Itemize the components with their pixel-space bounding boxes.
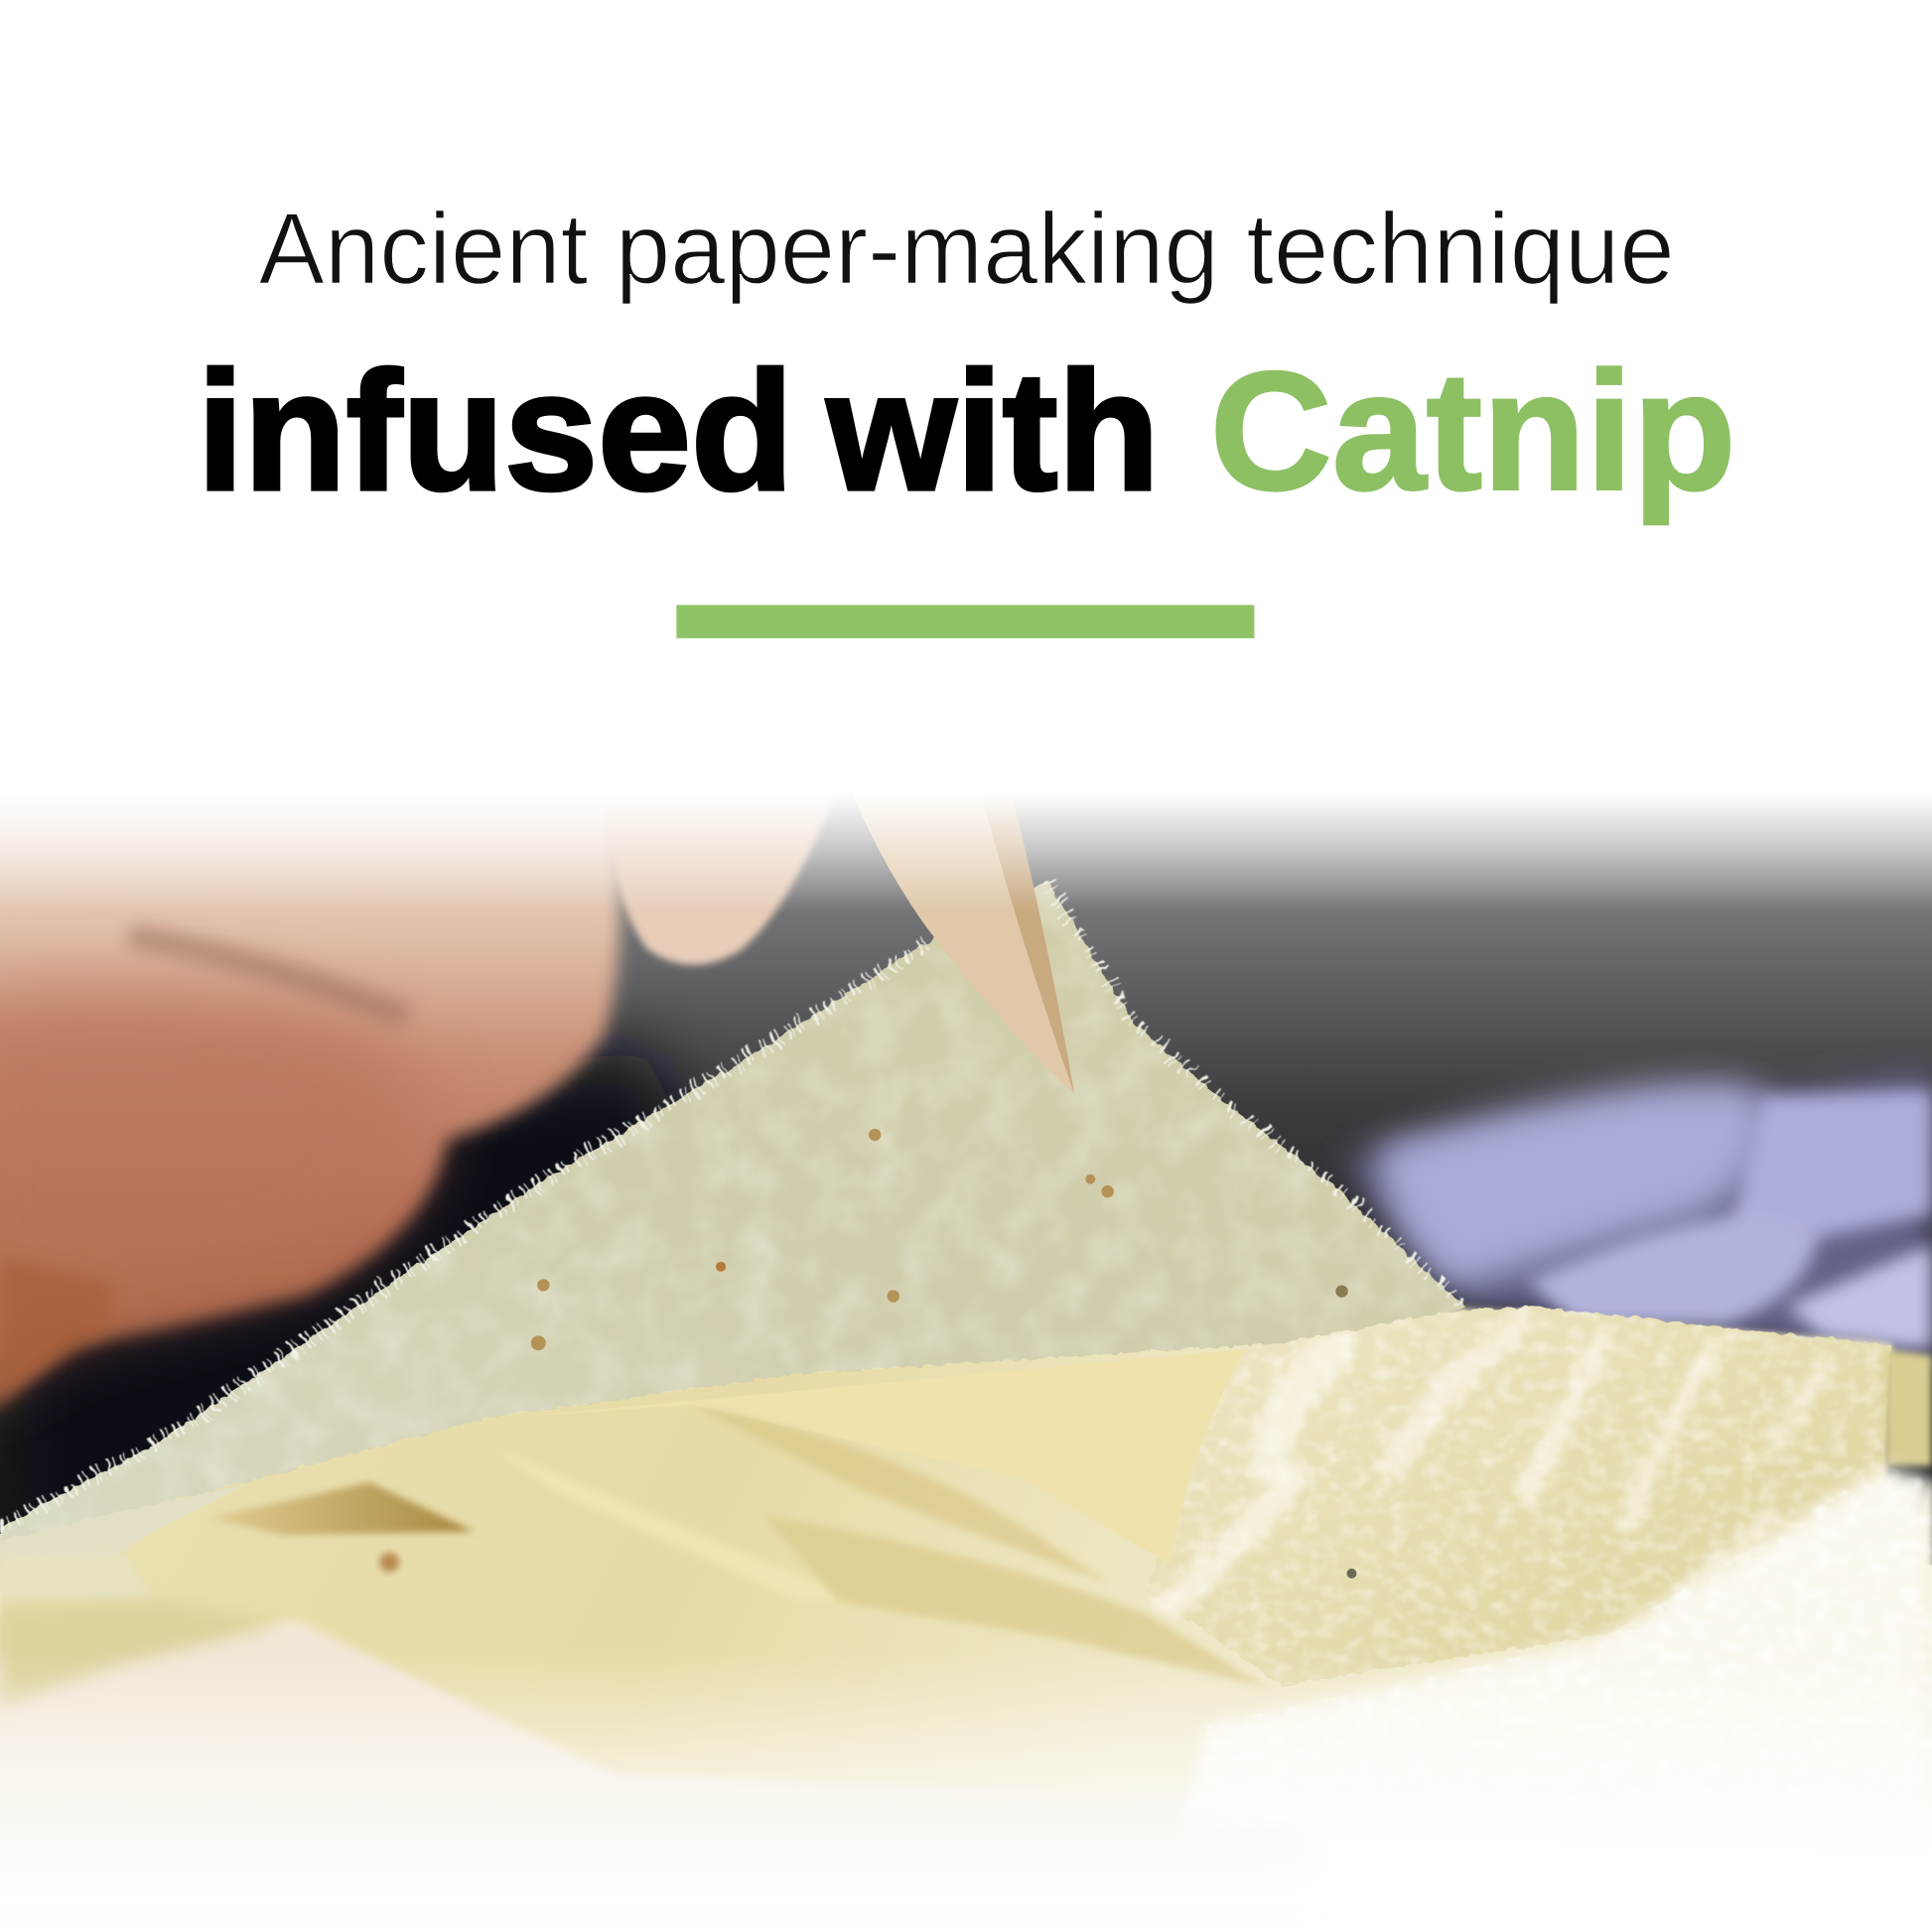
lower stack of paper [0,1300,1932,1849]
white streaks on ridged paper [1171,1330,1824,1601]
title word: infused: infused [198,338,793,526]
photo: hand lifting a sheet of catnip paper [0,727,1932,1910]
wooden pick [850,788,1074,1094]
paper fibre fringe [0,942,926,1528]
lifted paper sheet [0,881,1466,1540]
paper seed flecks [531,1129,1348,1350]
bottom white fade [0,1651,1932,1910]
title line 1: Ancient paper-making technique [259,192,1675,305]
fingers [0,788,838,1417]
white paper pile at lower right [1182,1466,1932,1849]
gap between paper layers [209,1482,475,1535]
title word: with: with [826,338,1160,526]
blurred lavender objects [1343,1072,1932,1368]
top white fade [0,727,1932,911]
green divider bar [676,605,1254,638]
title word in green: Catnip [1210,338,1736,526]
title line 2 [198,338,1736,526]
photo backdrop [0,776,1932,1565]
table surface [0,1589,1307,1885]
